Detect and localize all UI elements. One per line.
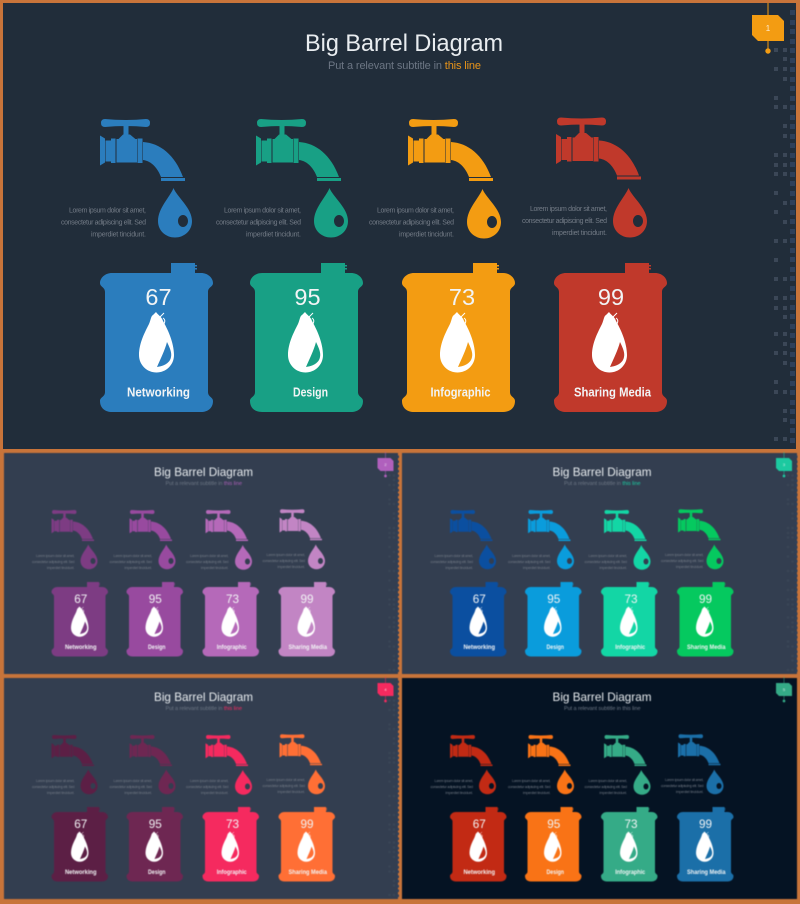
icon: water drop [314,188,348,238]
slide background [3,3,796,449]
column: Networking [430,735,506,882]
column: Networking: Lorem ipsum dolor sit amet, [36,554,75,558]
column: Infographic [186,735,259,882]
column: Infographic: Infographic [217,869,247,876]
column: Design [216,119,363,412]
column: Design: imperdiet tincidunt. [124,566,152,570]
column: Design: 95 [547,818,561,831]
icon: tap [256,119,341,181]
column: Sharing Media: imperdiet tincidunt. [676,565,704,569]
label: Networking [127,386,190,400]
column: Sharing Media: consectetur adipiscing elit. Sed [262,784,305,788]
column: Infographic: 73 [624,818,638,831]
panel: blue green variant [402,452,798,674]
column: Design: 95 [149,593,162,606]
column: Infographic [369,119,515,412]
text block: imperdiet tincidunt. [399,232,454,238]
column: Design: Lorem ipsum dolor sit amet, [114,779,152,783]
icon: oil drop [288,312,323,372]
column: Design: Lorem ipsum dolor sit amet, [114,554,152,558]
pattern strip [774,10,795,443]
column: Design: imperdiet tincidunt. [523,566,551,570]
column: Networking: consectetur adipiscing elit. Sed [430,560,473,564]
page tag: 2 [384,462,387,467]
column: Infographic: Lorem ipsum dolor sit amet, [190,554,229,558]
column: Sharing Media: Lorem ipsum dolor sit amet, [665,553,704,557]
column: Sharing Media: consectetur adipiscing elit. Sed [661,559,704,563]
column: Design: Design [148,644,166,651]
column: Design [508,735,582,882]
column: Design: 95 [149,818,162,831]
panel: main slide, blue green orange red [3,3,796,449]
column: Design: consectetur adipiscing elit. Sed [508,560,551,564]
title: Big Barrel Diagram [154,465,253,479]
icon: tap [556,118,641,180]
column: Infographic: Lorem ipsum dolor sit amet, [588,554,627,558]
column: Networking [32,510,108,656]
column: Infographic: imperdiet tincidunt. [600,566,627,570]
column: Sharing Media [522,118,667,412]
column: Networking: imperdiet tincidunt. [446,566,473,570]
column: Infographic [584,735,658,882]
barrel [402,263,515,412]
text block: Lorem ipsum dolor sit amet, [224,208,301,214]
column: Networking [61,119,213,412]
icon: water drop [158,188,192,238]
slide background [4,678,398,899]
column: Sharing Media: Lorem ipsum dolor sit amet, [665,778,704,782]
column: Design: Lorem ipsum dolor sit amet, [512,779,551,783]
title: Big Barrel Diagram [154,690,253,704]
column: Networking: consectetur adipiscing elit. Sed [32,785,75,789]
column: Infographic: consectetur adipiscing elit. Sed [584,560,627,564]
panel: dark navy variant [402,677,797,899]
text block: imperdiet tincidunt. [246,232,301,238]
column: Sharing Media: Sharing Media [288,869,327,876]
column: Sharing Media: 99 [699,818,712,831]
panel: maroon pink orange variant [4,677,399,899]
column: Infographic: imperdiet tincidunt. [201,566,229,570]
column: Infographic: 73 [624,593,638,606]
column: Infographic: Infographic [615,869,646,876]
value: 99 [598,284,624,310]
column: Networking: Lorem ipsum dolor sit amet, [434,779,473,783]
column: Design [110,510,183,656]
text block: consectetur adipiscing elit. Sed [61,220,146,226]
column: Networking: consectetur adipiscing elit. Sed [430,785,473,789]
icon: oil drop [139,312,174,372]
column: Design: Design [546,644,564,651]
text block [216,208,301,238]
column: Networking: Networking [464,644,495,651]
label: Design [293,386,328,400]
column: Design [508,510,582,656]
column: Design: consectetur adipiscing elit. Sed [110,560,152,564]
text block: Lorem ipsum dolor sit amet, [69,208,146,214]
page tag [752,3,784,54]
column: Infographic: consectetur adipiscing elit. Sed [186,785,229,789]
column: Sharing Media: Sharing Media [687,644,726,651]
subtitle: Put a relevant subtitle in this line [564,481,640,487]
title: Big Barrel Diagram [552,690,652,704]
text block: consectetur adipiscing elit. Sed [522,218,607,225]
column: Networking: 67 [74,593,87,606]
column: Sharing Media: Sharing Media [687,869,726,876]
column: Infographic: 73 [226,593,239,606]
value: 67 [145,284,172,310]
column: Infographic: Infographic [217,644,247,651]
column: Sharing Media: imperdiet tincidunt. [278,565,305,569]
column: Design: Design [546,869,564,876]
column: Networking: Networking [464,869,495,876]
column: Networking: Lorem ipsum dolor sit amet, [36,779,75,783]
value: 95 [294,284,321,310]
icon: tap [408,119,493,181]
column: Sharing Media: 99 [300,593,314,606]
text block [522,206,607,237]
panel: purple variant [4,452,399,674]
page tag [776,452,792,477]
column: Infographic: Lorem ipsum dolor sit amet, [588,779,627,783]
column: Networking [32,735,108,882]
page tag [378,677,394,702]
column: Networking [430,510,506,656]
column: Sharing Media [661,734,734,882]
column: Sharing Media: consectetur adipiscing elit. Sed [262,559,305,563]
column: Sharing Media: imperdiet tincidunt. [676,790,704,794]
text block: consectetur adipiscing elit. Sed [216,220,301,226]
text block [369,208,454,238]
column: Infographic: Infographic [615,644,646,651]
icon: oil drop [592,312,627,372]
column: Sharing Media [661,509,734,656]
icon: water drop [613,188,647,238]
title: Big Barrel Diagram [552,465,652,479]
column: Design [110,735,183,882]
column: Infographic: imperdiet tincidunt. [201,791,229,795]
column: Sharing Media: consectetur adipiscing elit. Sed [661,784,704,788]
column: Networking: 67 [473,818,486,831]
text block: Lorem ipsum dolor sit amet, [530,206,607,213]
column: Networking: 67 [473,593,486,606]
title: Big Barrel Diagram [305,30,503,57]
column: Networking: Networking [65,644,97,651]
column: Sharing Media: Sharing Media [288,644,327,651]
column: Networking: imperdiet tincidunt. [47,791,75,795]
icon: tap [100,119,185,181]
subtitle: Put a relevant subtitle in this line [328,60,481,72]
value: 73 [449,284,475,310]
column: Networking: consectetur adipiscing elit. Sed [32,560,75,564]
column: Sharing Media: Lorem ipsum dolor sit amet, [266,778,305,782]
text block [61,208,146,238]
subtitle: Put a relevant subtitle in this line [166,481,242,487]
column: Design: 95 [547,593,561,606]
column: Infographic [584,510,658,656]
icon: water drop [467,189,501,238]
page tag: 4 [384,687,387,692]
column: Infographic: imperdiet tincidunt. [600,791,627,795]
text block: Lorem ipsum dolor sit amet, [377,208,454,214]
label: Infographic [430,386,491,400]
column: Infographic: consectetur adipiscing elit. Sed [186,560,229,564]
page tag: 3 [783,462,786,467]
column: Networking: Networking [65,869,97,876]
subtitle: Put a relevant subtitle in this line [166,706,242,712]
subtitle: Put a relevant subtitle in this line [564,706,640,712]
icon: oil drop [440,312,475,372]
column: Sharing Media: 99 [699,593,712,606]
page tag: 1 [766,24,771,33]
barrel [250,263,363,412]
column: Networking: imperdiet tincidunt. [47,566,75,570]
page tag [378,452,394,477]
column: Infographic: consectetur adipiscing elit. Sed [584,785,627,789]
column: Sharing Media: Lorem ipsum dolor sit amet, [266,553,305,557]
slide background [4,453,398,674]
column: Infographic [186,510,259,656]
page tag: 5 [783,687,786,692]
column: Networking: 67 [74,818,87,831]
column: Sharing Media [262,734,335,882]
column: Sharing Media: 99 [300,818,314,831]
column: Design: Lorem ipsum dolor sit amet, [512,554,551,558]
barrel [554,263,667,412]
label: Sharing Media [574,386,652,400]
column: Networking: Lorem ipsum dolor sit amet, [434,554,473,558]
column: Design: imperdiet tincidunt. [124,791,152,795]
column: Design: consectetur adipiscing elit. Sed [110,785,152,789]
text block: consectetur adipiscing elit. Sed [369,220,454,226]
column: Sharing Media [262,509,335,656]
barrel [100,263,213,412]
text block: imperdiet tincidunt. [91,232,146,238]
column: Infographic: Lorem ipsum dolor sit amet, [190,779,229,783]
column: Design: Design [148,869,166,876]
slide background [402,678,797,899]
column: Design: consectetur adipiscing elit. Sed [508,785,551,789]
page tag [776,677,792,702]
column: Networking: imperdiet tincidunt. [446,791,473,795]
text block: imperdiet tincidunt. [552,230,607,237]
column: Design: imperdiet tincidunt. [523,791,551,795]
column: Infographic: 73 [226,818,239,831]
slide background [402,453,797,674]
column: Sharing Media: imperdiet tincidunt. [278,790,305,794]
